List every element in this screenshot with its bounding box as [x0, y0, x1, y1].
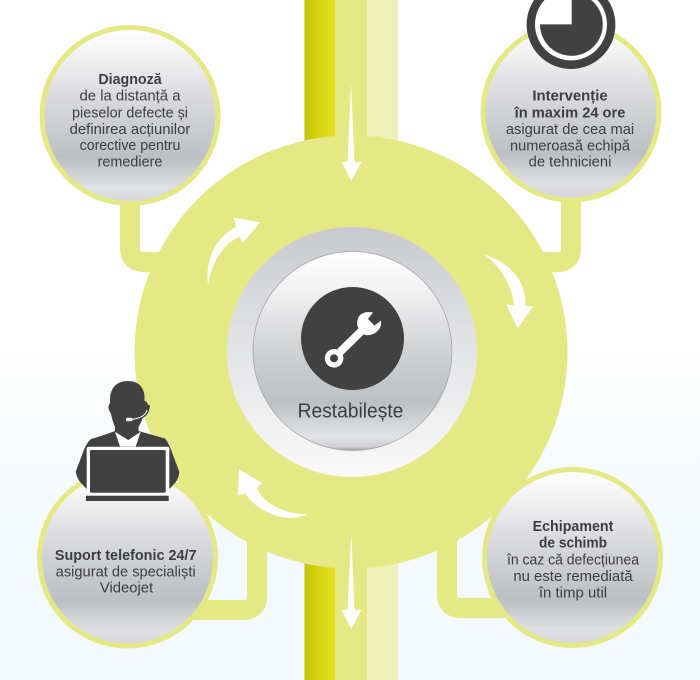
arrow: curved top right — [484, 254, 533, 328]
connector: bottom right — [447, 510, 510, 608]
arrow: curved bottom left — [238, 469, 307, 518]
connector: top right — [520, 195, 571, 262]
outer ring — [227, 227, 477, 477]
text: Diagnoză — [70, 72, 191, 171]
connector: bottom left — [190, 510, 257, 610]
text: Echipament de schimb: în caz că defecțiunea — [506, 552, 640, 568]
text: Intervenție: de tehnicieni — [529, 155, 611, 171]
text: Echipament de schimb — [506, 519, 640, 601]
text: Diagnoză: Diagnoză — [98, 72, 163, 88]
text: Diagnoză: pieselor defecte și — [72, 105, 188, 121]
arrow: bottom vertical — [341, 532, 361, 629]
central button — [227, 227, 477, 477]
arrow: curved top left — [207, 218, 260, 285]
text: Echipament de schimb: nu este remediată — [513, 569, 634, 585]
connector: top left — [130, 195, 180, 262]
large central circle — [134, 136, 568, 568]
circle: Diagnoză — [42, 28, 218, 204]
label: Restabilește: Restabilește — [298, 400, 403, 422]
text: Echipament de schimb: în timp util — [538, 585, 607, 601]
text: Diagnoză: corective pentru — [80, 138, 180, 154]
text: Diagnoză: de la distanță a — [80, 89, 181, 105]
text: Suport telefonic — [55, 548, 197, 597]
text: Intervenție: Intervenție — [532, 89, 608, 105]
text: Diagnoză: definirea acțiunilor — [70, 122, 191, 138]
inner disc — [253, 252, 452, 450]
text: Suport telefonic: Suport telefonic 24/7 — [55, 548, 197, 564]
text: Echipament de schimb: de schimb — [539, 536, 607, 552]
text: Suport telefonic: Videojet — [100, 581, 153, 597]
icon: wrench — [301, 287, 404, 390]
vertical stripes — [304, 0, 398, 680]
icon: clock — [527, 0, 615, 69]
icon: operator with laptop — [76, 381, 179, 501]
text: Intervenție: asigurat de cea mai — [506, 122, 634, 138]
text: Intervenție: în maxim 24 ore — [514, 105, 625, 121]
arrow: top vertical — [342, 83, 361, 181]
text: Echipament de schimb: Echipament — [533, 519, 614, 535]
circle: Intervenție — [483, 24, 659, 200]
text: Intervenție: numeroasă echipă — [510, 139, 631, 155]
text: Intervenție — [506, 89, 634, 171]
circle: Echipament de schimb — [484, 470, 660, 646]
circle: Suport telefonic — [40, 470, 216, 646]
text: Suport telefonic: asigurat de specialiști — [56, 565, 196, 581]
text: Diagnoză: remediere — [98, 155, 162, 171]
